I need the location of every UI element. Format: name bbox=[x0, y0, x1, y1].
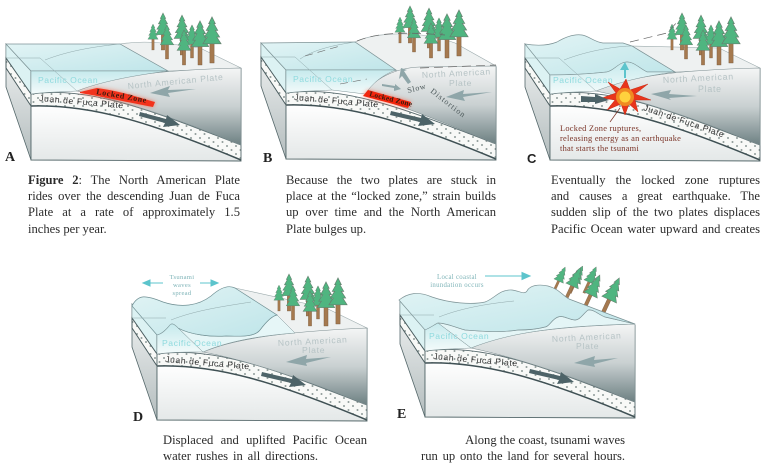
tsunami waves spread label: Tsunami bbox=[170, 274, 194, 281]
locked zone bbox=[80, 87, 155, 107]
North American Plate: North American bbox=[663, 71, 734, 85]
caption A: Plate at a rate of approximately 1.5 bbox=[28, 205, 240, 219]
North American Plate bulged bbox=[365, 65, 496, 144]
caption A: Figure 2: The North American Plate bbox=[28, 173, 240, 187]
caption A: rides over the descending Juan de Fuca bbox=[28, 189, 240, 203]
Pacific Ocean with run-up: Pacific Ocean bbox=[429, 331, 489, 341]
Pacific Ocean with waves bbox=[132, 287, 295, 354]
local coastal inundation label: inundation occurs bbox=[430, 282, 484, 289]
North American Plate bulged: Slow bbox=[406, 82, 427, 95]
label C: C bbox=[527, 151, 537, 166]
caption B: Plate bulges up. bbox=[286, 222, 366, 236]
Juan de Fuca Plate bbox=[294, 92, 435, 126]
panel B: slow distortion bbox=[261, 6, 496, 166]
caption B bbox=[286, 173, 496, 236]
Pacific Ocean: Pacific Ocean bbox=[38, 75, 98, 85]
Pacific Ocean with uplift: Pacific Ocean bbox=[553, 75, 613, 85]
caption E: run up onto the land for several hours. bbox=[421, 449, 625, 463]
caption C: sudden slip of the two plates displaces bbox=[551, 205, 760, 219]
Juan de Fuca Plate: Juan de Fuca Plate bbox=[294, 92, 379, 109]
caption E: Along the coast, tsunami waves bbox=[465, 433, 625, 447]
label E: E bbox=[397, 407, 406, 422]
caption D bbox=[163, 433, 367, 463]
North American Plate bulged: Distortion bbox=[429, 86, 468, 120]
Juan de Fuca Plate bbox=[433, 351, 574, 384]
North American Plate bbox=[77, 68, 241, 145]
caption E bbox=[421, 433, 625, 463]
caption C: Eventually the locked zone ruptures bbox=[551, 173, 760, 187]
panel A: plates before strain bbox=[5, 13, 241, 165]
caption A bbox=[28, 173, 240, 236]
label A: A bbox=[5, 150, 16, 165]
land surface with trees bbox=[630, 13, 760, 72]
land surface with trees bbox=[120, 13, 241, 71]
caption C: and causes a great earthquake. The bbox=[551, 189, 760, 203]
land surface with trees bbox=[355, 6, 496, 71]
caption B: place at the “locked zone,” strain builds bbox=[286, 189, 496, 203]
panel E: inundation bbox=[397, 264, 635, 422]
tilted trees bbox=[549, 264, 627, 318]
caption B: Because the two plates are stuck in bbox=[286, 173, 496, 187]
local coastal inundation label bbox=[430, 272, 530, 289]
Juan de Fuca Plate: Juan de Fuca Plate bbox=[642, 102, 726, 140]
Pacific Ocean with run-up bbox=[399, 285, 635, 351]
Pacific Ocean bbox=[261, 42, 396, 94]
earthquake starburst bbox=[602, 79, 651, 115]
caption D: water rushes in all directions. bbox=[163, 449, 318, 463]
caption C bbox=[551, 173, 760, 236]
Juan de Fuca Plate bbox=[165, 354, 306, 387]
caption B: up over time and the North American bbox=[286, 205, 496, 219]
tsunami waves spread label: waves bbox=[173, 282, 191, 289]
Juan de Fuca Plate: Juan de Fuca Plate bbox=[433, 351, 518, 368]
North American Plate: North American bbox=[552, 330, 622, 344]
caption A: inches per year. bbox=[28, 222, 107, 236]
Pacific Ocean: Pacific Ocean bbox=[293, 74, 353, 84]
label D: D bbox=[133, 410, 143, 425]
locked zone: Locked Zone bbox=[369, 89, 414, 109]
rupture callout bbox=[560, 108, 681, 153]
Juan de Fuca Plate bbox=[39, 93, 180, 127]
North American Plate: Plate bbox=[302, 345, 325, 355]
North American Plate bulged: North American bbox=[422, 66, 491, 80]
Pacific Ocean with uplift bbox=[525, 35, 675, 94]
caption C: Pacific Ocean water upward and creates bbox=[551, 222, 760, 236]
panel D: waves spreading bbox=[132, 274, 367, 425]
panel C: rupture bbox=[525, 13, 760, 166]
rupture callout: Locked Zone ruptures, bbox=[560, 124, 641, 133]
local coastal inundation label: Local coastal bbox=[437, 274, 477, 281]
North American Plate bbox=[203, 328, 367, 405]
Pacific Ocean with waves: Pacific Ocean bbox=[162, 338, 222, 348]
Juan de Fuca Plate: Juan de Fuca Plate bbox=[39, 93, 124, 110]
Pacific Ocean bbox=[6, 44, 168, 94]
North American Plate: North American Plate bbox=[127, 72, 224, 91]
land surface with trees bbox=[235, 274, 367, 333]
rupture callout: that starts the tsunami bbox=[560, 144, 639, 153]
Juan de Fuca Plate: Juan de Fuca Plate bbox=[165, 354, 250, 371]
North American Plate bbox=[596, 68, 760, 145]
North American Plate: Plate bbox=[698, 84, 722, 94]
label B: B bbox=[263, 151, 272, 166]
caption D: Displaced and uplifted Pacific Ocean bbox=[163, 433, 367, 447]
North American Plate: Plate bbox=[576, 341, 599, 351]
rupture callout: releasing energy as an earthquake bbox=[560, 134, 681, 143]
North American Plate bbox=[471, 324, 635, 402]
tsunami waves spread label bbox=[143, 274, 218, 297]
locked zone: Locked Zone bbox=[96, 87, 148, 105]
North American Plate bulged: Plate bbox=[449, 78, 472, 88]
Juan de Fuca Plate bbox=[581, 94, 726, 140]
North American Plate: North American bbox=[278, 334, 348, 348]
tsunami waves spread label: spread bbox=[172, 290, 192, 297]
